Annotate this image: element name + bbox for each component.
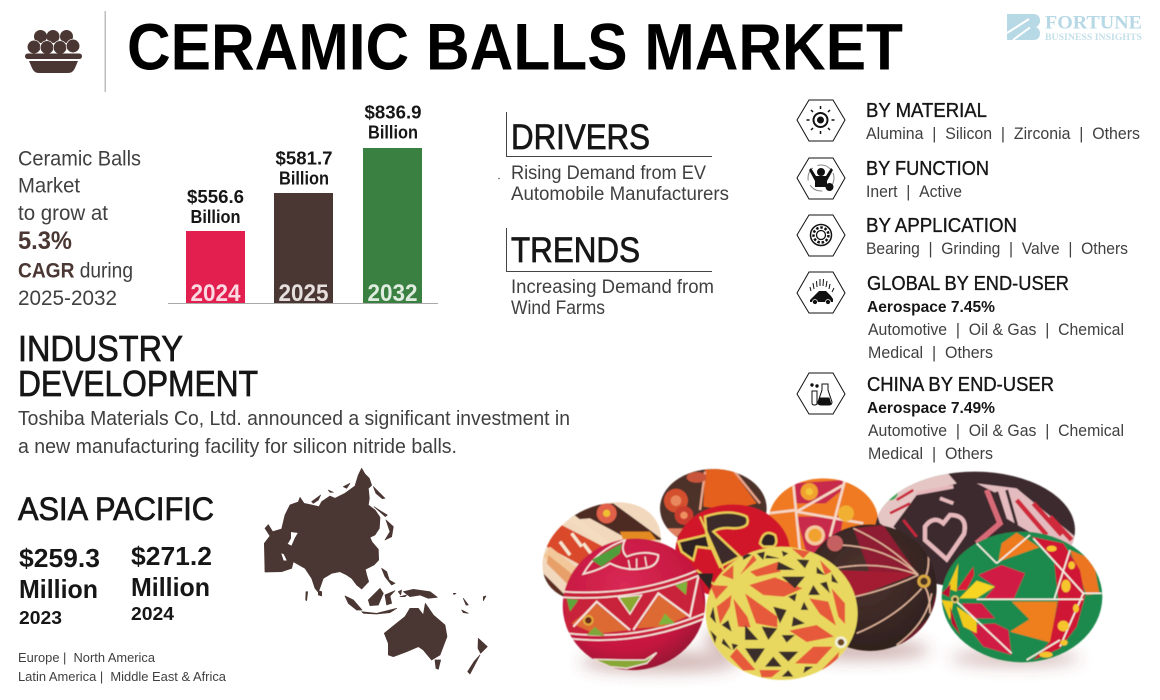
egg: front yellow lattice — [706, 547, 858, 680]
item: china by end-user: CHINA BY END-USER — [867, 374, 1054, 396]
other regions list: Europe | North America — [18, 650, 156, 665]
bar: 2032: 2032 — [368, 280, 418, 307]
bar: 2032: Billion — [368, 122, 418, 142]
panel: Asia Pacific: 2024 — [131, 604, 174, 624]
item: by function: BY FUNCTION — [866, 158, 989, 180]
map: Asia Pacific — [264, 468, 487, 674]
bar: 2024 — [186, 186, 245, 307]
logo: Fortune Business Insights: BUSINESS INSIGHTS — [1045, 33, 1142, 43]
panel: drivers: DRIVERS — [511, 118, 650, 157]
bar: 2025: 2025 — [278, 280, 328, 307]
item: china by end-user: Medical | Others — [868, 445, 993, 463]
panel: industry development: Toshiba Materials Co, Ltd. announced a significant investment in — [18, 407, 570, 430]
bar: 2024: 2024 — [190, 280, 241, 307]
panel: trends: Increasing Demand from — [511, 277, 714, 298]
icon: bearing hexagon — [797, 215, 845, 256]
item: global by end-user: Automotive | Oil & Gas | Chemical — [868, 321, 1124, 339]
egg: back left patterned — [542, 502, 662, 598]
panel: drivers — [498, 112, 729, 205]
panel: Asia Pacific: $271.2 — [131, 541, 212, 571]
panel: trends: Wind Farms — [511, 298, 605, 319]
other regions list: Latin America | Middle East & Africa — [18, 669, 227, 684]
item: china by end-user: Automotive | Oil & Gas | Chemical — [868, 422, 1124, 440]
item: by function: Inert | Active — [866, 183, 962, 201]
photo: painted ceramic eggs — [525, 467, 1102, 680]
bar: 2024: $556.6 — [187, 186, 244, 207]
item: by function — [797, 158, 989, 201]
egg: back orange — [768, 478, 878, 554]
item: china by end-user — [797, 373, 1124, 463]
CAGR text block: to grow at — [18, 202, 108, 225]
bar: 2032 — [363, 102, 422, 307]
panel: Asia Pacific: ASIA PACIFIC — [18, 491, 214, 527]
panel: Asia Pacific — [18, 491, 214, 628]
panel: Asia Pacific: Million — [19, 574, 98, 604]
CAGR text block: 2025-2032 — [18, 287, 117, 310]
panel: Asia Pacific: 2023 — [19, 608, 62, 628]
item: global by end-user: Aerospace 7.45% — [867, 299, 995, 316]
egg: dark with pink lines — [803, 524, 937, 651]
panel: industry development: DEVELOPMENT — [18, 363, 258, 404]
CAGR text block: 5.3% — [18, 227, 72, 255]
egg shadows — [580, 626, 1080, 672]
item: by application — [797, 215, 1128, 258]
bar chart: market size — [168, 102, 438, 307]
panel: industry development — [18, 328, 570, 458]
icon: car hexagon — [797, 272, 845, 313]
bar: 2024: Billion — [190, 206, 240, 227]
bar: 2032: $836.9 — [364, 102, 422, 122]
panel: drivers: Automobile Manufacturers — [511, 184, 729, 205]
icon: basket of ceramic balls — [25, 30, 82, 73]
egg: front red — [562, 538, 706, 671]
item: global by end-user: GLOBAL BY END-USER — [867, 273, 1069, 295]
item: by material: Alumina | Silicon | Zirconia | Others — [866, 125, 1140, 143]
icon: material hexagon — [797, 100, 845, 141]
item: global by end-user — [797, 272, 1124, 362]
item: by application: BY APPLICATION — [866, 215, 1017, 237]
egg: back black and orange — [659, 468, 768, 538]
CAGR text block: Ceramic Balls — [18, 148, 141, 170]
CAGR text block: Market — [18, 174, 80, 198]
bar: 2025 — [274, 148, 333, 307]
CAGR text block — [18, 148, 141, 310]
CAGR text block: CAGR during — [18, 260, 133, 282]
logo: Fortune Business Insights: FORTUNE — [1045, 12, 1142, 34]
panel: drivers: Rising Demand from EV — [511, 163, 706, 184]
bar: 2025: $581.7 — [276, 148, 332, 168]
bar: 2025: Billion — [279, 168, 329, 188]
icon: flask hexagon — [797, 373, 845, 414]
item: by application: Bearing | Grinding | Valve | Others — [866, 240, 1128, 258]
item: china by end-user: Aerospace 7.49% — [867, 400, 995, 417]
icon: function hexagon — [797, 158, 845, 199]
panel: Asia Pacific: Million — [131, 572, 210, 602]
item: by material — [797, 100, 1140, 143]
item: by material: BY MATERIAL — [866, 100, 987, 122]
panel: trends: TRENDS — [511, 231, 640, 270]
other regions list — [18, 650, 227, 684]
panel: industry development: INDUSTRY — [18, 328, 183, 369]
panel: industry development: a new manufacturing facility for silicon nitride balls. — [18, 435, 457, 458]
egg: green star — [942, 532, 1102, 662]
egg: red and black swirl — [675, 504, 790, 599]
header divider — [104, 11, 106, 92]
panel: Asia Pacific: $259.3 — [19, 543, 100, 573]
item: global by end-user: Medical | Others — [868, 344, 993, 362]
title: CERAMIC BALLS MARKET — [127, 10, 903, 84]
panel: trends — [506, 228, 714, 319]
egg: black with hearts — [873, 470, 1075, 588]
logo: Fortune Business Insights — [1007, 12, 1142, 43]
